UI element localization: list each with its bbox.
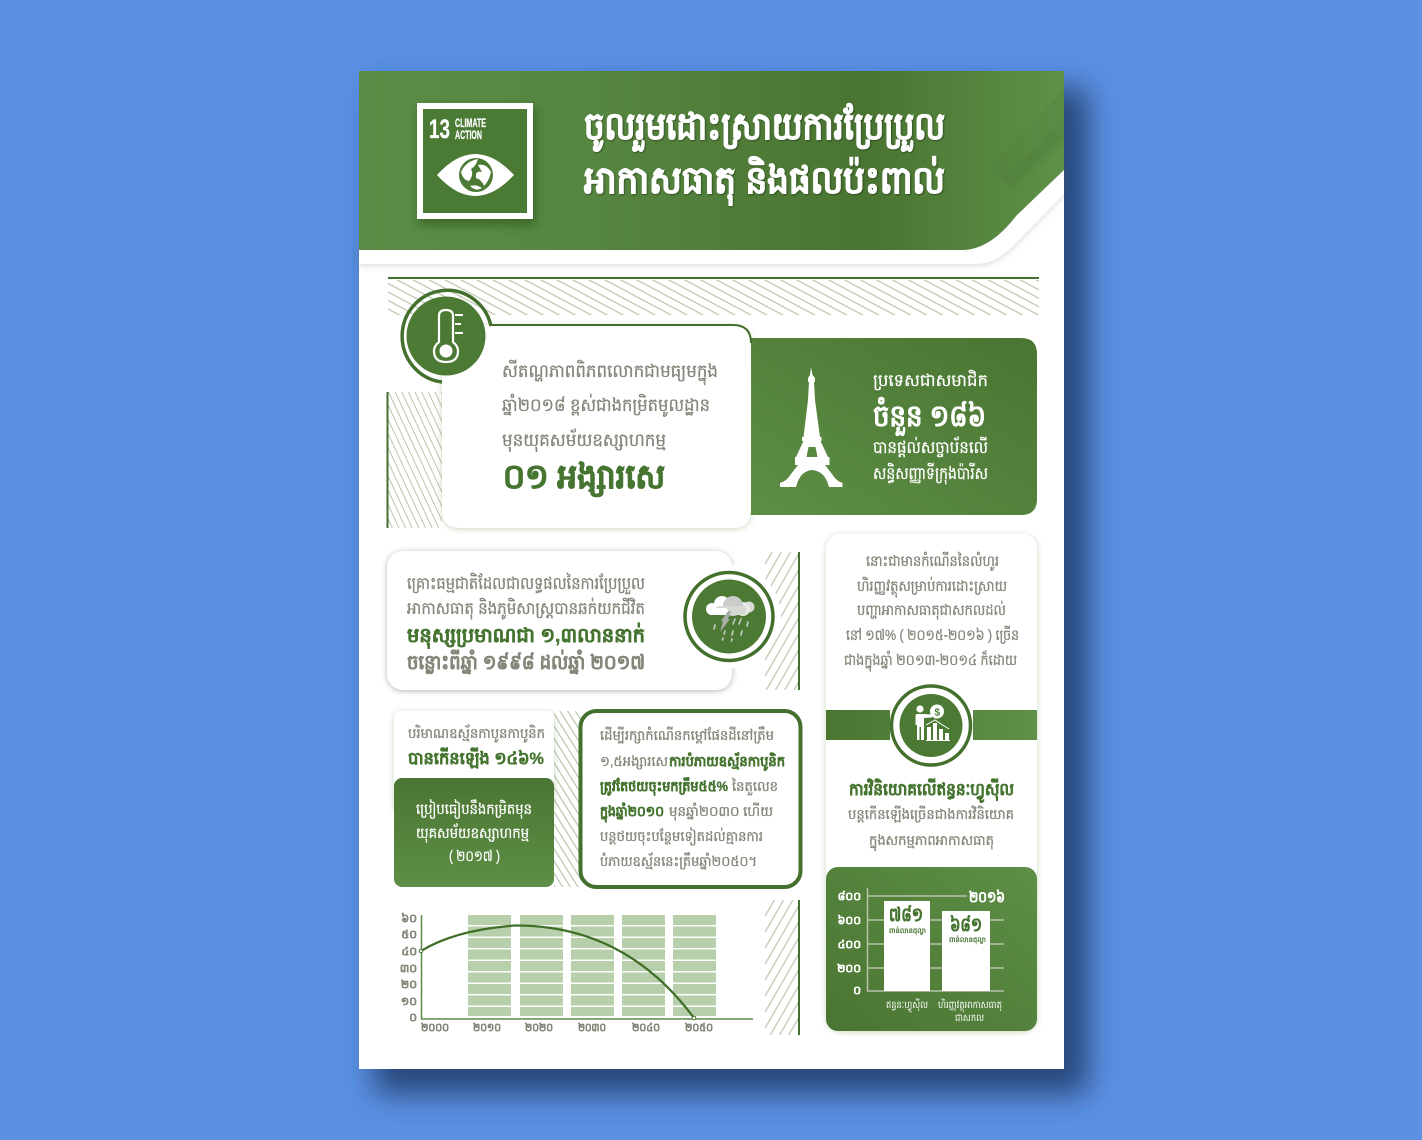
- y labels: ០: [853, 985, 861, 997]
- x labels: [886, 998, 1002, 1024]
- icon: eye with globe: [437, 154, 514, 196]
- CO2 text: បានកើនឡើង ១៤៦%: [408, 747, 544, 769]
- finance text: ហិរញ្ញវត្ថុសម្រាប់ការដោះស្រាយ: [857, 576, 1007, 598]
- badge number: 13: [429, 114, 450, 144]
- hatch: between CO2 cards: [554, 711, 581, 887]
- icon: storm cloud: [677, 564, 781, 668]
- bar: climate finance: ពាន់លានដុល្លា: [949, 935, 986, 945]
- panel: emission targets: បន្តថយចុះបន្ថែមទៀតដល់គ្មានការ: [600, 827, 763, 846]
- y axis labels: ៦០: [401, 912, 417, 925]
- panel: emission targets: ក្នុងឆ្នាំ២០១០: [600, 802, 664, 823]
- finance text: ជាងក្នុងឆ្នាំ ២០១៣-២០១៤ ក៏ដោយ: [844, 650, 1017, 672]
- y axis labels: ៥០: [401, 929, 417, 941]
- panel: Paris agreement: [745, 338, 1037, 515]
- y labels: ៤០០: [838, 939, 861, 951]
- finance text: បញ្ហាអាកាសធាតុជាសកលដល់: [857, 600, 1006, 620]
- disasters text: [407, 572, 645, 675]
- y labels: ៦០០: [838, 914, 861, 927]
- panel: emission targets: ដើម្បីរក្សាកំណើនកម្តៅផែនដីនៅត្រឹម: [600, 726, 774, 744]
- badge title: [455, 116, 486, 142]
- panel: CO2 concentration: [394, 711, 554, 887]
- hatch: top band: [388, 277, 1039, 315]
- x labels: ហិរញ្ញវត្ថុអាកាសធាតុ: [938, 998, 1002, 1013]
- disasters text: ចន្លោះពីឆ្នាំ ១៩៩៨ ដល់ឆ្នាំ ២០១៧: [407, 649, 645, 675]
- paris text: [873, 369, 988, 485]
- trend line: [926, 720, 949, 729]
- x axis labels: [421, 1022, 713, 1034]
- panel: emission targets: ១,៥អង្សារសេ: [600, 753, 668, 770]
- investment text: ក្នុងសកម្មភាពអាកាសធាតុ: [869, 832, 994, 852]
- y axis labels: ១០: [401, 996, 417, 1008]
- hatch: right of disasters card: [765, 552, 800, 690]
- poster sheet: [359, 71, 1064, 1069]
- CO2 comparison box: [394, 778, 554, 887]
- finance text: នោះជាមានកំណើននៃលំហូរ: [866, 551, 999, 571]
- poster shadow: [374, 88, 1088, 1094]
- panel: global temperature: [402, 290, 751, 528]
- y axis labels: ៣០: [400, 963, 417, 975]
- panel: emission targets: ការបំភាយឧស្ម័នកាបូនិក: [669, 752, 785, 771]
- temperature figure: ០១ អង្សារសេ: [503, 458, 665, 497]
- x axis labels: ២០២០: [525, 1022, 553, 1034]
- temperature text: ឆ្នាំ២០១៨ ខ្ពស់ជាងកម្រិតមូលដ្ឋាន: [502, 393, 710, 417]
- year label: ២០១៦: [969, 889, 1005, 906]
- panel: emission targets: បំភាយឧស្ម័ននេះត្រឹមឆ្នាំ២០៥០។: [600, 852, 757, 870]
- panel: climate finance: [826, 534, 1037, 1031]
- x axis labels: ២០៤០: [632, 1022, 660, 1034]
- x axis labels: ២០៥០: [685, 1022, 713, 1034]
- trend curve: [421, 925, 694, 1018]
- bar: fossil fuels: [884, 901, 930, 991]
- disasters text: គ្រោះធម្មជាតិដែលជាលទ្ធផលនៃការប្រែប្រួល: [407, 572, 645, 595]
- y labels: ៨០០: [838, 890, 861, 903]
- divider band: [826, 710, 1037, 740]
- bar: fossil fuels: ៧៨១: [889, 905, 923, 926]
- x axis labels: ២០០០: [421, 1022, 449, 1034]
- temperature text: សីតណ្ហភាពពិភពលោកជាមធ្យមក្នុង: [502, 359, 718, 385]
- x labels: ជាសកល: [955, 1013, 984, 1024]
- CO2 text: បរិមាណឧស្ម័នកាបូនកាបូនិក: [408, 724, 545, 743]
- dollar sign: $: [934, 708, 940, 718]
- y labels: ២០០: [837, 963, 861, 975]
- bars: [468, 915, 716, 1016]
- panel: emission targets: [580, 711, 800, 887]
- investment text: [848, 805, 1014, 852]
- hatch: right of trajectory chart: [765, 900, 800, 1035]
- y axis labels: ៤០: [401, 946, 417, 958]
- y axis labels: [400, 912, 417, 1024]
- CO2 comparison box: ( ២០១៧ ): [449, 848, 500, 865]
- investment heading: ការវិនិយោគលើឥន្ធនៈហ្វូស៊ីល: [849, 778, 1014, 803]
- icon: investor with chart: [892, 686, 970, 765]
- icon: thermometer: [402, 290, 491, 382]
- badge title: CLIMATE: [455, 116, 486, 130]
- hatch: left of temperature card: [386, 392, 442, 528]
- icon: Eiffel tower: [780, 367, 842, 487]
- panel: emission targets: មុនឆ្នាំ២០៣០ ហើយ: [669, 802, 773, 821]
- y labels: [837, 890, 861, 997]
- paris text: ចំនួន ១៨៦: [873, 396, 986, 437]
- paris text: សន្ធិសញ្ញាទីក្រុងប៉ារីស: [873, 462, 988, 485]
- paris text: បានផ្តល់សច្ចាប័នលើ: [873, 436, 988, 458]
- CO2 text: [408, 724, 545, 769]
- header band: [359, 71, 1064, 264]
- bar: climate finance: ៦៨១: [950, 915, 982, 936]
- temperature text: មុនយុគសម័យឧស្សាហកម្ម: [502, 428, 666, 452]
- x axis labels: ២០៣០: [578, 1022, 606, 1034]
- bar: fossil fuels: ពាន់លានដុល្លា: [889, 926, 926, 936]
- chart: investment comparison: [826, 867, 1037, 1031]
- title: ចូលរួមដោះស្រាយការប្រែប្រួល: [584, 103, 945, 152]
- x axis labels: ២០១០: [473, 1022, 501, 1034]
- x labels: ឥន្ធនៈហ្វូស៊ីល: [886, 998, 928, 1013]
- bar: climate finance: [942, 911, 990, 991]
- disasters text: មនុស្សប្រមាណជា ១,៣លាននាក់: [407, 622, 645, 649]
- temperature text: [502, 359, 718, 452]
- title: [584, 103, 945, 206]
- finance text: នៅ ១៧% ( ២០១៥-២០១៦ ) ច្រើន: [846, 625, 1019, 644]
- axes: [422, 915, 753, 1019]
- panel: emission targets: ត្រូវតែថយចុះមកត្រឹម៥៥%: [600, 777, 729, 796]
- CO2 comparison box: យុគសម័យឧស្សាហកម្ម: [416, 823, 529, 843]
- panel: natural disasters: [387, 551, 781, 690]
- chart: emissions trajectory: [400, 912, 753, 1034]
- disasters text: អាកាសធាតុ និងភូមិសាស្ត្របានឆក់យកជីវិត: [407, 597, 645, 620]
- paris text: ប្រទេសជាសមាជិក: [873, 369, 988, 391]
- panel: emission targets: នៃតួលេខ: [731, 777, 778, 796]
- y axis labels: ០: [409, 1012, 417, 1024]
- finance text: [844, 551, 1019, 672]
- investment text: បន្តកើនឡើងច្រើនជាងការវិនិយោគ: [848, 805, 1014, 823]
- CO2 comparison box: ប្រៀបធៀបនឹងកម្រិតមុន: [416, 799, 532, 819]
- title: អាកាសធាតុ និងផលប៉ះពាល់: [584, 156, 945, 206]
- SDG 13 badge: [420, 106, 530, 216]
- grid and axis: [867, 888, 1004, 991]
- y axis labels: ២០: [401, 979, 417, 991]
- badge title: ACTION: [455, 128, 482, 142]
